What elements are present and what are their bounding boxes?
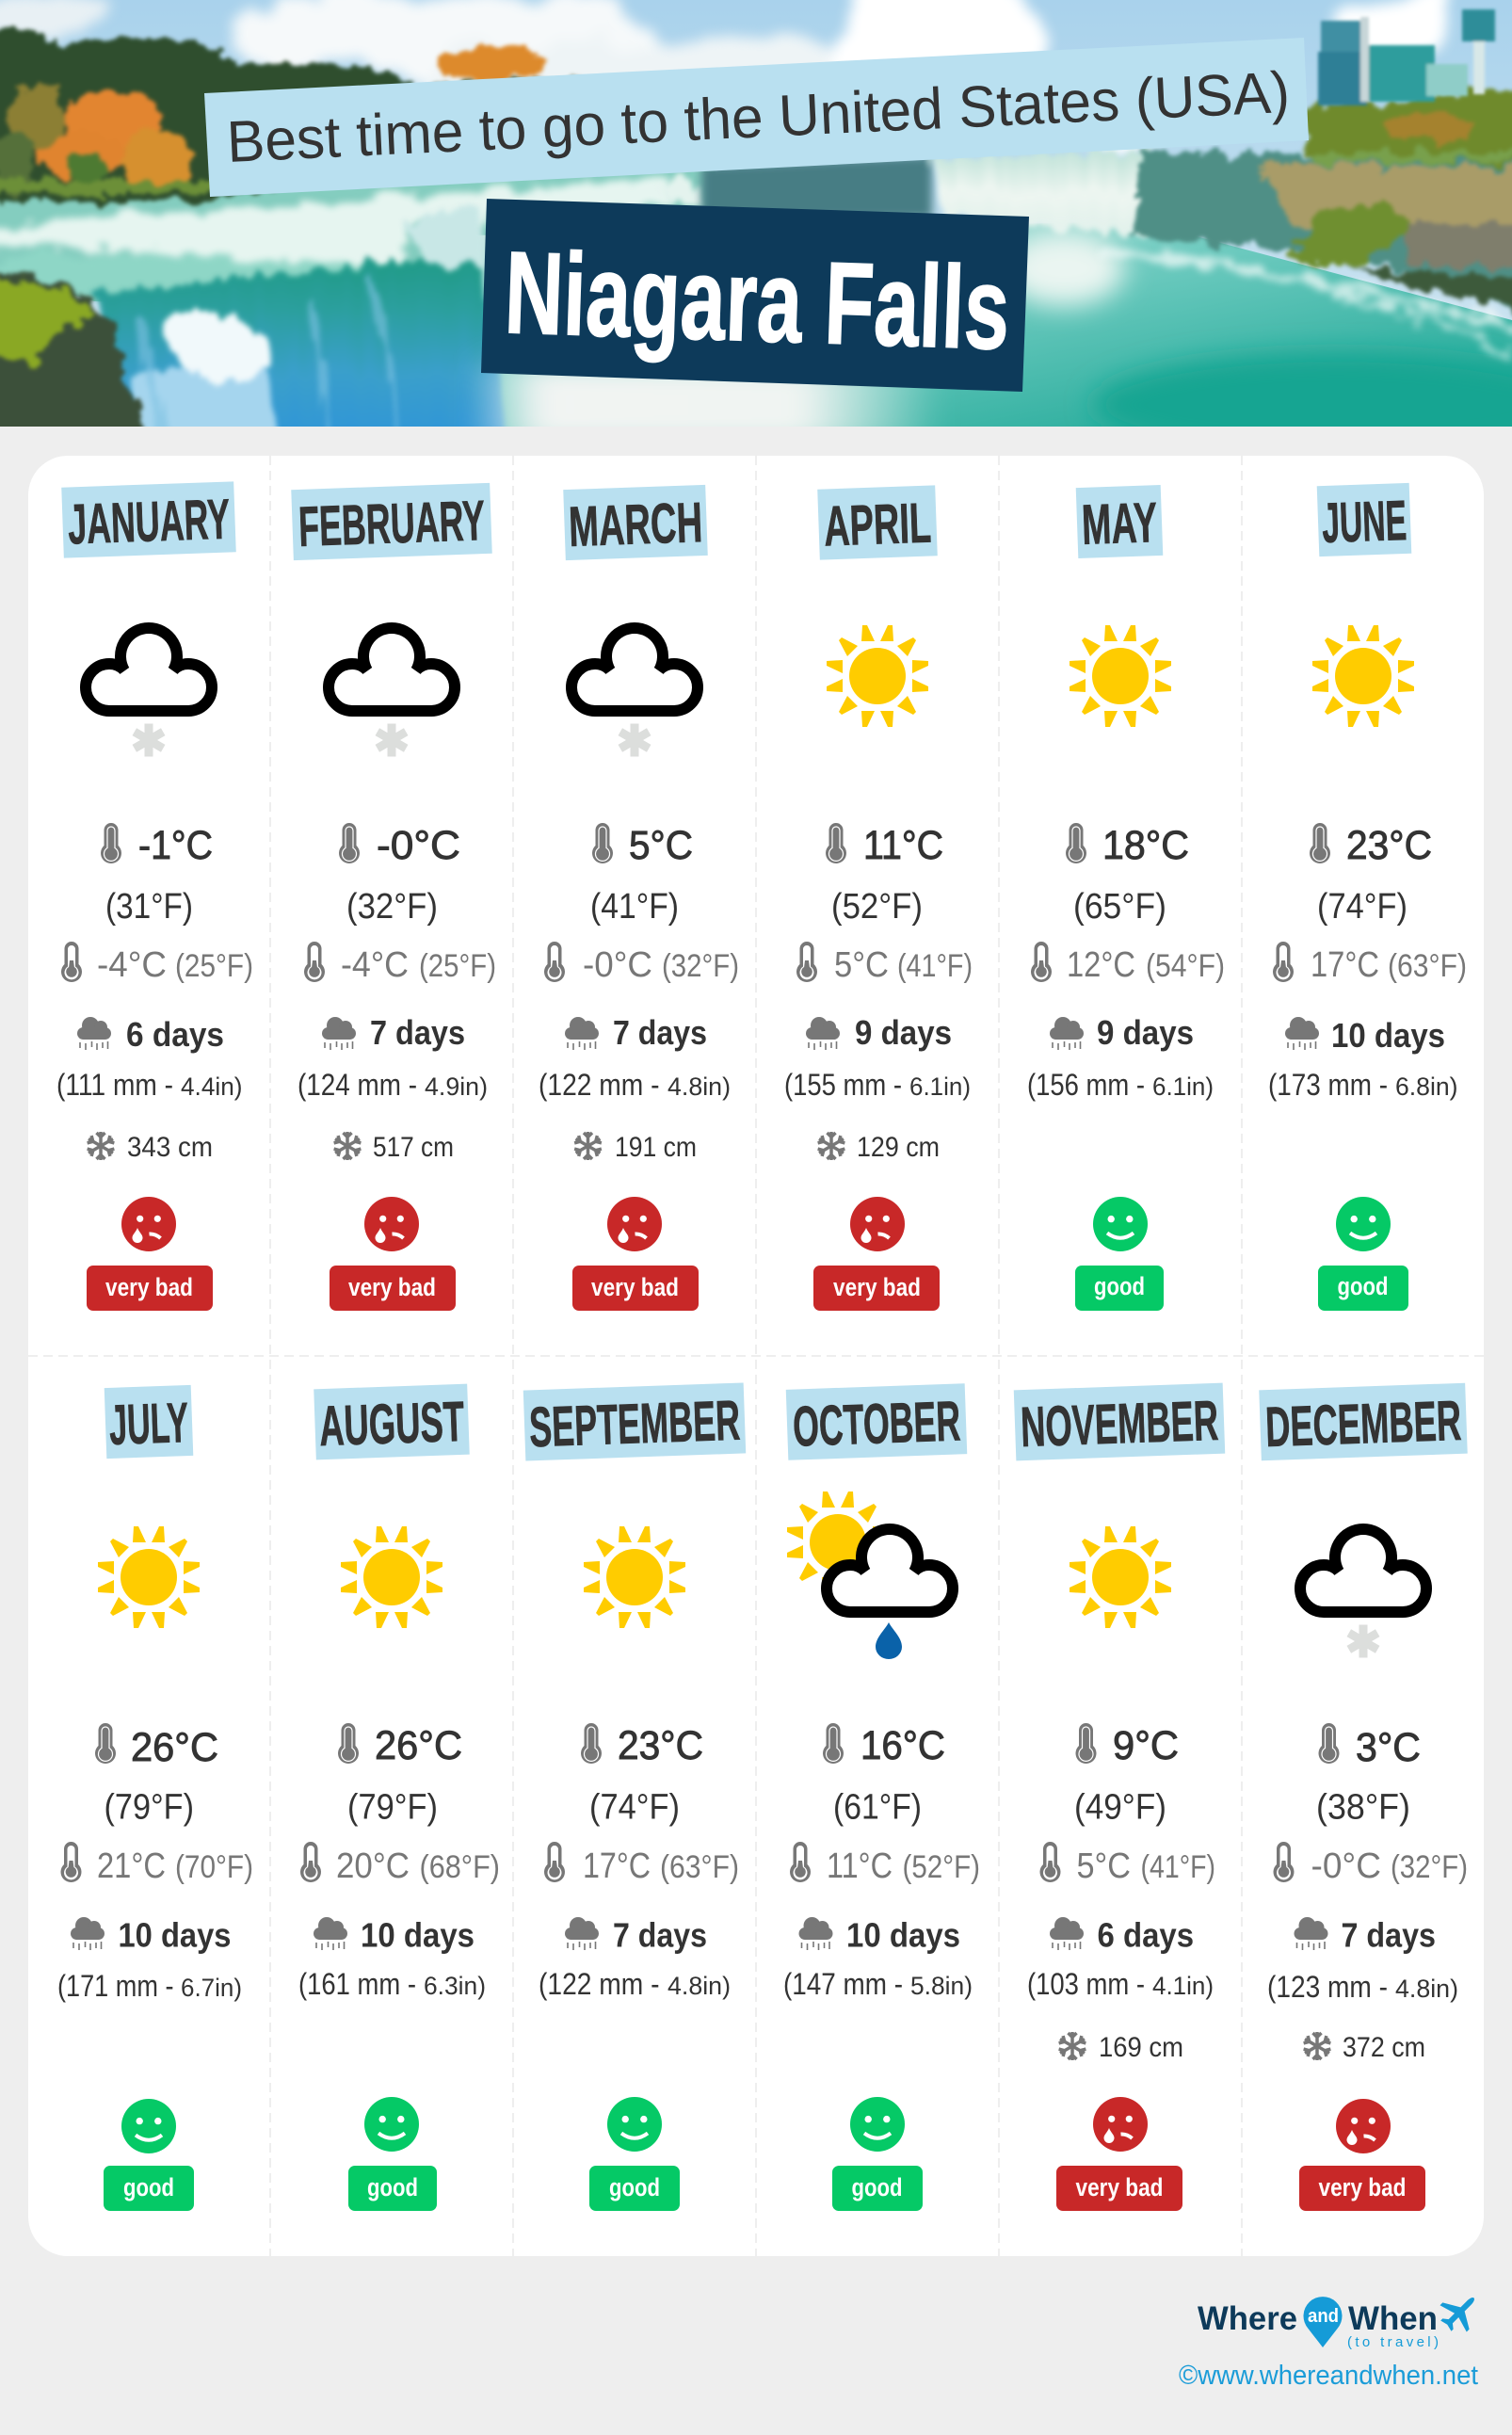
precipitation: 6.7in) xyxy=(181,1974,242,2002)
rainy days xyxy=(1285,1016,1445,1055)
rainy days xyxy=(565,1915,707,1955)
month label: AUGUST xyxy=(318,1390,465,1458)
rainy days: 7 days xyxy=(1341,1915,1436,1955)
precipitation: (124 mm - xyxy=(298,1068,417,1102)
month: September xyxy=(523,1382,746,2211)
month label xyxy=(523,1382,746,1461)
icon: snow cloud xyxy=(571,628,698,757)
snowfall xyxy=(1303,2032,1425,2063)
icon: snow cloud xyxy=(1300,1529,1426,1657)
precipitation: 4.8in) xyxy=(668,1972,731,2000)
precipitation: (123 mm - xyxy=(1267,1970,1388,2004)
rainy days xyxy=(1294,1915,1436,1955)
rating: very bad xyxy=(833,1273,921,1301)
high temperature fahrenheit: (79°F) xyxy=(347,1787,438,1827)
icon: sun xyxy=(1312,625,1414,727)
rainy days xyxy=(798,1915,960,1955)
logo: Where and When: (to travel) xyxy=(1347,2334,1439,2350)
rating: very bad xyxy=(591,1273,679,1301)
high temperature: 5°C xyxy=(629,823,693,868)
precipitation: (122 mm - xyxy=(539,1967,659,2001)
precipitation: 4.4in) xyxy=(181,1072,243,1101)
high temperature xyxy=(1075,1723,1179,1768)
snowfall: 169 cm xyxy=(1099,2032,1183,2063)
low temperature: 17°C xyxy=(583,1846,651,1886)
snowfall xyxy=(573,1132,697,1163)
rating: very bad xyxy=(1075,2173,1164,2201)
rainy days: 10 days xyxy=(1331,1016,1445,1055)
month: February xyxy=(291,483,496,1311)
rainy days xyxy=(565,1013,707,1052)
snowfall xyxy=(333,1132,454,1163)
rating xyxy=(330,1197,456,1311)
low temperature: -0°C xyxy=(583,945,652,985)
low temperature xyxy=(1273,1842,1468,1886)
month label xyxy=(1317,483,1411,556)
high temperature: -1°C xyxy=(138,823,213,868)
high temperature xyxy=(1318,1723,1421,1770)
month label xyxy=(105,1385,193,1459)
month label xyxy=(786,1383,967,1460)
rating: good xyxy=(609,2173,660,2201)
month label xyxy=(1014,1383,1225,1460)
rating: very bad xyxy=(105,1273,193,1301)
snowfall: 372 cm xyxy=(1343,2032,1425,2063)
rainy days: 10 days xyxy=(119,1915,232,1955)
high temperature: 26°C xyxy=(131,1725,218,1770)
rating xyxy=(87,1197,213,1311)
low temperature: (63°F) xyxy=(660,1849,739,1885)
rating xyxy=(589,2097,680,2211)
month label: JUNE xyxy=(1321,489,1407,555)
icon: snow cloud xyxy=(86,628,212,757)
low temperature: 5°C xyxy=(834,945,889,985)
precipitation: 6.3in) xyxy=(424,1972,486,2000)
low temperature: (70°F) xyxy=(175,1849,253,1885)
rating xyxy=(572,1197,699,1311)
rainy days xyxy=(77,1015,224,1054)
low temperature: (32°F) xyxy=(1391,1849,1468,1885)
month: August xyxy=(298,1384,500,2211)
rainy days xyxy=(71,1915,232,1955)
precipitation: 6.1in) xyxy=(909,1072,971,1101)
logo: Where and When: When xyxy=(1348,2300,1438,2337)
month: April xyxy=(784,485,973,1311)
low temperature: 11°C xyxy=(827,1846,893,1886)
rating xyxy=(1056,2097,1182,2211)
snowfall: 129 cm xyxy=(857,1132,940,1163)
high temperature: 23°C xyxy=(1346,823,1432,868)
rating xyxy=(1075,1197,1164,1311)
precipitation: (173 mm - xyxy=(1268,1068,1388,1102)
precipitation: 5.8in) xyxy=(910,1972,973,2000)
rainy days: 7 days xyxy=(613,1915,707,1955)
low temperature: -0°C xyxy=(1311,1846,1381,1886)
icon: sun behind rain cloud xyxy=(787,1492,953,1659)
subtitle banner: Best time to go to the United States (USA) xyxy=(225,60,1291,175)
high temperature xyxy=(339,823,460,868)
rating xyxy=(813,1197,940,1311)
high temperature: 11°C xyxy=(863,823,943,868)
low temperature: 20°C xyxy=(336,1846,410,1886)
rainy days xyxy=(1050,1013,1194,1052)
low temperature xyxy=(61,942,253,985)
precipitation: 4.8in) xyxy=(1395,1975,1458,2003)
rating: very bad xyxy=(1318,2173,1407,2201)
low temperature: (68°F) xyxy=(420,1849,500,1885)
rating: good xyxy=(123,2173,174,2201)
rating xyxy=(832,2097,923,2211)
icon: sun xyxy=(1070,625,1171,727)
high temperature fahrenheit: (31°F) xyxy=(105,887,193,927)
rating: good xyxy=(367,2173,418,2201)
precipitation: (161 mm - xyxy=(298,1967,416,2001)
high temperature: 23°C xyxy=(618,1723,703,1768)
low temperature: (54°F) xyxy=(1146,948,1225,984)
month: December xyxy=(1259,1383,1468,2211)
low temperature: (32°F) xyxy=(662,948,739,984)
rainy days: 7 days xyxy=(370,1013,465,1052)
high temperature fahrenheit: (41°F) xyxy=(590,887,679,927)
snowfall xyxy=(87,1132,213,1163)
precipitation: (155 mm - xyxy=(784,1068,902,1102)
precipitation: 4.1in) xyxy=(1152,1972,1214,2000)
high temperature fahrenheit: (74°F) xyxy=(589,1787,680,1827)
low temperature xyxy=(1273,942,1467,985)
rainy days: 10 days xyxy=(361,1915,475,1955)
month label xyxy=(1076,485,1163,558)
rainy days: 6 days xyxy=(1098,1915,1194,1955)
precipitation: (171 mm - xyxy=(57,1969,173,2003)
high temperature fahrenheit: (79°F) xyxy=(104,1787,194,1827)
low temperature: -4°C xyxy=(341,945,409,985)
low temperature: (41°F) xyxy=(1141,1849,1215,1885)
icon: sun xyxy=(827,625,928,727)
high temperature: 16°C xyxy=(861,1723,945,1768)
logo: Where and When xyxy=(1198,2284,1488,2350)
icon: sun xyxy=(341,1526,442,1628)
title banner: Niagara Falls xyxy=(503,228,1011,375)
month label: SEPTEMBER xyxy=(528,1389,741,1459)
low temperature: (52°F) xyxy=(902,1849,980,1885)
title banner xyxy=(481,199,1029,392)
month: October xyxy=(783,1383,980,2211)
low temperature: 12°C xyxy=(1067,945,1135,985)
low temperature: (41°F) xyxy=(897,948,973,984)
low temperature xyxy=(790,1842,980,1886)
high temperature fahrenheit: (52°F) xyxy=(831,887,923,927)
icon: plane xyxy=(1433,2284,1488,2339)
icon: snow cloud xyxy=(329,628,455,757)
snowfall: 343 cm xyxy=(127,1132,213,1163)
month label xyxy=(314,1384,470,1459)
rating: good xyxy=(851,2173,902,2201)
icon: map pin xyxy=(1303,2297,1343,2347)
precipitation: (156 mm - xyxy=(1027,1068,1145,1102)
header photo: Niagara Falls landscape xyxy=(0,0,1512,457)
month: January xyxy=(56,481,253,1311)
month label: FEBRUARY xyxy=(298,489,486,558)
precipitation: 6.8in) xyxy=(1395,1072,1457,1101)
low temperature xyxy=(304,942,496,985)
low temperature: 17°C xyxy=(1311,945,1379,985)
high temperature xyxy=(1310,823,1432,868)
rainy days xyxy=(314,1915,475,1955)
rating xyxy=(104,2099,194,2211)
high temperature xyxy=(592,823,693,868)
rainy days xyxy=(1050,1915,1194,1955)
month label: OCTOBER xyxy=(792,1389,961,1459)
month label: NOVEMBER xyxy=(1020,1389,1219,1459)
precipitation: 4.9in) xyxy=(425,1072,488,1101)
website credit: ©www.whereandwhen.net xyxy=(1179,2361,1478,2391)
month: November xyxy=(1014,1383,1225,2211)
icon: sun xyxy=(584,1526,685,1628)
precipitation: (122 mm - xyxy=(539,1068,659,1102)
rainy days xyxy=(806,1013,952,1052)
low temperature xyxy=(796,942,973,985)
rating xyxy=(1299,2099,1425,2211)
logo: Where and When: and xyxy=(1308,2306,1339,2327)
month label: JULY xyxy=(108,1391,189,1457)
low temperature xyxy=(544,942,739,985)
month: March xyxy=(539,485,739,1311)
low temperature xyxy=(1031,942,1225,985)
precipitation: 4.8in) xyxy=(668,1072,731,1101)
high temperature: 18°C xyxy=(1102,823,1189,868)
snowfall xyxy=(1058,2032,1183,2063)
month: June xyxy=(1268,483,1467,1311)
month label: JANUARY xyxy=(67,488,231,556)
high temperature fahrenheit: (32°F) xyxy=(346,887,438,927)
month: May xyxy=(1027,485,1225,1311)
rating: very bad xyxy=(348,1273,436,1301)
rating: good xyxy=(1094,1272,1145,1300)
low temperature xyxy=(60,1842,253,1886)
month: July xyxy=(57,1385,253,2211)
high temperature: 26°C xyxy=(375,1723,462,1768)
rainy days: 9 days xyxy=(1097,1013,1194,1052)
rating xyxy=(1318,1197,1408,1311)
rating: good xyxy=(1337,1272,1388,1300)
high temperature xyxy=(95,1723,218,1770)
snowfall: 191 cm xyxy=(615,1132,697,1163)
high temperature xyxy=(581,1723,703,1768)
high temperature xyxy=(1066,823,1189,868)
high temperature: -0°C xyxy=(377,823,460,868)
snowfall: 517 cm xyxy=(373,1132,454,1163)
month label xyxy=(291,483,492,560)
low temperature xyxy=(544,1842,739,1886)
rainy days: 10 days xyxy=(846,1915,960,1955)
month label: MARCH xyxy=(568,491,703,558)
logo: Where and When: Where xyxy=(1198,2300,1297,2337)
month label xyxy=(563,485,708,560)
month label: APRIL xyxy=(823,492,932,557)
icon: sun xyxy=(98,1526,200,1628)
high temperature: 3°C xyxy=(1356,1725,1421,1770)
icon: sun xyxy=(1070,1526,1171,1628)
precipitation: (147 mm - xyxy=(783,1967,903,2001)
precipitation: 6.1in) xyxy=(1152,1072,1214,1101)
high temperature fahrenheit: (74°F) xyxy=(1317,887,1407,927)
high temperature xyxy=(826,823,943,868)
high temperature: 9°C xyxy=(1113,1723,1179,1768)
rainy days: 9 days xyxy=(855,1013,952,1052)
snowfall xyxy=(817,1132,940,1163)
low temperature: (25°F) xyxy=(175,948,253,984)
panel: calendar card xyxy=(28,456,1484,2256)
precipitation: (103 mm - xyxy=(1027,1967,1145,2001)
rainy days: 7 days xyxy=(613,1013,707,1052)
high temperature fahrenheit: (38°F) xyxy=(1316,1787,1410,1827)
high temperature xyxy=(101,823,213,868)
low temperature: (63°F) xyxy=(1388,948,1467,984)
month label: MAY xyxy=(1081,491,1158,556)
rainy days xyxy=(322,1013,465,1052)
low temperature: -4°C xyxy=(97,945,167,985)
precipitation: (111 mm - xyxy=(56,1068,173,1102)
high temperature fahrenheit: (61°F) xyxy=(833,1787,922,1827)
month label xyxy=(817,485,938,560)
low temperature: 21°C xyxy=(97,1846,166,1886)
month label xyxy=(61,481,236,558)
low temperature: (25°F) xyxy=(419,948,496,984)
low temperature: 5°C xyxy=(1077,1846,1131,1886)
high temperature xyxy=(823,1723,945,1768)
high temperature fahrenheit: (65°F) xyxy=(1073,887,1166,927)
rainy days: 6 days xyxy=(126,1015,224,1054)
high temperature fahrenheit: (49°F) xyxy=(1074,1787,1166,1827)
rating xyxy=(348,2097,437,2211)
low temperature xyxy=(1039,1842,1215,1886)
high temperature xyxy=(338,1723,462,1768)
low temperature xyxy=(300,1842,500,1886)
